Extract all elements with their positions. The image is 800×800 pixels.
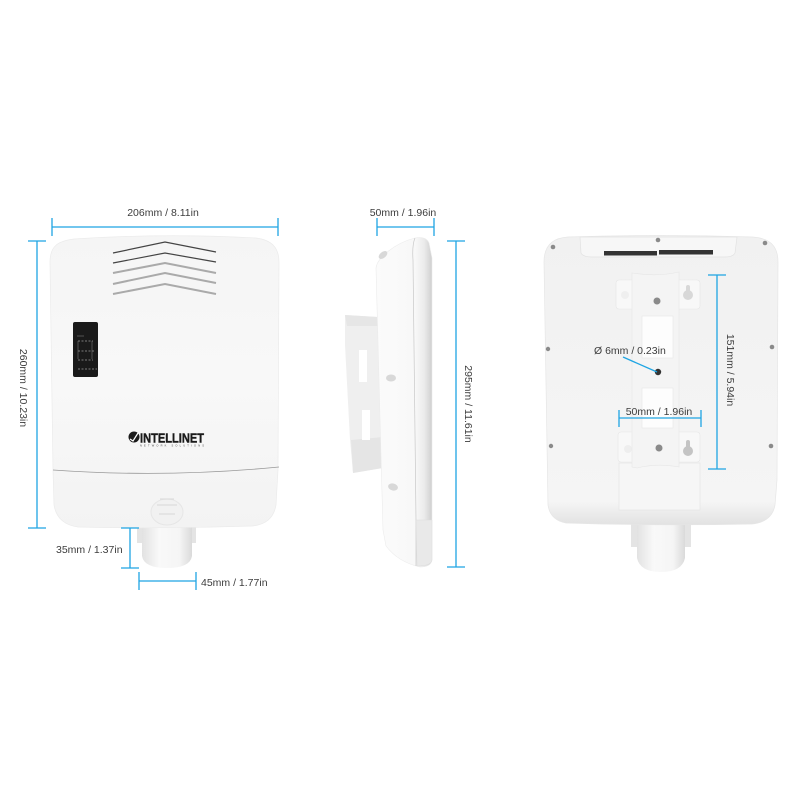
dimension: pipe depth 35mm: 35mm / 1.37in [56,544,123,556]
callout: hole diameter [594,345,666,372]
keyhole ears: top [616,280,700,309]
panel: front view of device [50,236,279,568]
screws [546,238,774,452]
panel: back view of device [544,236,778,572]
keyhole ears: bottom [618,432,700,462]
dimension: pipe width 45mm: 45mm / 1.77in [201,577,268,589]
dimension: width 206mm [52,207,278,236]
dimension: pipe depth 35mm [56,528,139,568]
Intellinet logo: INTELLINET [140,432,204,446]
device body: side [376,238,432,567]
cover seam [53,467,279,473]
body seam [413,238,416,566]
pipe mount: back [631,515,691,572]
top vent cover [580,237,737,257]
dimension: height 295mm: 295mm / 11.61in [462,365,474,443]
dimension: height 295mm [447,241,474,567]
lower label plate [619,463,700,510]
dimension: bracket width 50mm [619,406,701,427]
dimension: pipe width 45mm [139,572,268,590]
LED status panel [73,322,98,377]
wall bracket: side [345,315,383,473]
dimension: bracket width 50mm: 50mm / 1.96in [626,406,692,418]
wall bracket: back [632,272,679,468]
pipe mount: front [137,525,196,568]
device body: back [544,236,778,525]
mounting holes: side [377,249,399,492]
Intellinet logo [128,432,204,448]
device body: front [50,236,279,528]
vent slats [113,242,216,294]
cable cover latch [151,499,183,525]
dimension: bracket length 151mm [708,275,736,469]
dimension: height 260mm [17,241,46,528]
callout: hole diameter: Ø 6mm / 0.23in [594,345,666,357]
panel: side view of device [345,238,432,567]
dimension: depth 50mm: 50mm / 1.96in [370,207,436,219]
dimension: bracket length 151mm: 151mm / 5.94in [724,334,736,406]
Intellinet logo: NETWORK SOLUTIONS [140,444,204,448]
dimension: depth 50mm [370,207,436,236]
dimension: height 260mm: 260mm / 10.23in [17,349,29,427]
bottom clip [416,520,432,566]
dimension: width 206mm: 206mm / 8.11in [127,207,199,219]
